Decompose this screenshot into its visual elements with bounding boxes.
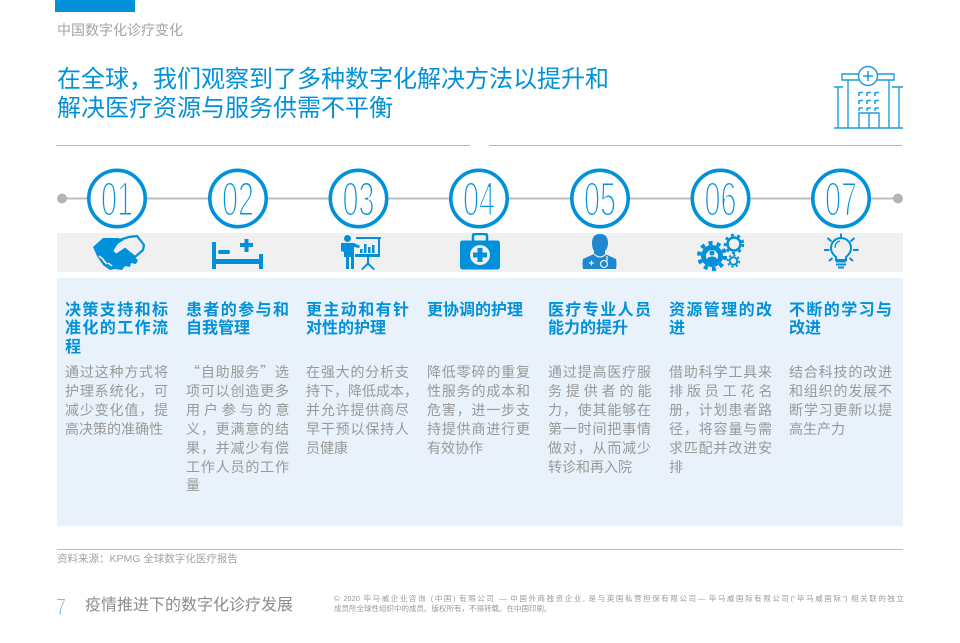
column 06: 资源管理的改 bbox=[669, 302, 772, 319]
step 05 bbox=[572, 170, 628, 227]
header divider left bbox=[56, 145, 470, 146]
icon: gears with person bbox=[699, 235, 743, 269]
icon: light bulb bbox=[824, 234, 858, 268]
icon: first aid kit bbox=[460, 234, 500, 270]
column 01 bbox=[65, 301, 168, 437]
column 01: 护理系统化，可 bbox=[65, 383, 168, 399]
footer title: 疫情推进下的数字化诊疗发展 bbox=[85, 597, 293, 614]
copyright: © 2020 毕马威企业咨询 (中国) 有限公司 — 中国外商独资企业, 是与英国私营担保有限公司— 毕马威国际有限公司(“毕马威国际”) 相关联的独立 bbox=[334, 594, 904, 603]
column 01: 程 bbox=[65, 339, 81, 356]
section label: 中国数字化诊疗变化 bbox=[57, 22, 183, 38]
column 02: 用 户 参 与 的 意 bbox=[186, 402, 289, 418]
column 02: 项可以创造更多 bbox=[186, 383, 289, 399]
step 06: 06 bbox=[704, 173, 737, 226]
column 07: 改进 bbox=[789, 320, 821, 337]
icon: hospital bed bbox=[212, 239, 263, 269]
column 06: 求匹配并改进安 bbox=[669, 440, 772, 456]
column 01: 决策支持和标 bbox=[65, 302, 168, 319]
step 04: 04 bbox=[463, 173, 495, 226]
step 03: 03 bbox=[342, 173, 375, 226]
column 02: 自我管理 bbox=[186, 320, 250, 337]
column 07: 高生产力 bbox=[789, 421, 845, 437]
step 07: 07 bbox=[825, 173, 857, 226]
column 06: 借助科学工具来 bbox=[669, 364, 772, 380]
title: 解决医疗资源与服务供需不平衡 bbox=[57, 94, 393, 122]
column 05: 力，使其能够在 bbox=[548, 402, 651, 418]
column 02: 量 bbox=[186, 477, 200, 493]
column 04: 危害，进一步支 bbox=[427, 402, 530, 418]
column 01: 高决策的准确性 bbox=[65, 421, 163, 437]
column 03 bbox=[306, 301, 418, 456]
header divider right bbox=[489, 145, 902, 146]
column 03: 在强大的分析支 bbox=[306, 364, 409, 380]
step 06 bbox=[692, 170, 749, 227]
column 05 bbox=[548, 301, 651, 475]
column 07: 断学习更新以提 bbox=[789, 402, 892, 418]
step 04 bbox=[451, 170, 507, 227]
icon: doctor bbox=[582, 234, 616, 269]
icon: handshake bbox=[93, 236, 144, 270]
step 01 bbox=[89, 170, 145, 227]
step 01: 01 bbox=[101, 173, 133, 226]
column 04: 持提供商进行更 bbox=[427, 421, 530, 437]
column 06: 进 bbox=[669, 320, 685, 337]
column 06: 册，计划患者路 bbox=[669, 402, 772, 418]
column 03: 更主动和有针 bbox=[306, 302, 409, 319]
step 02 bbox=[210, 170, 266, 227]
timeline bbox=[57, 168, 903, 228]
icon band bbox=[57, 233, 903, 272]
column 06: 排 版 员 工 花 名 bbox=[669, 383, 772, 399]
column 03: 并允许提供商尽 bbox=[306, 402, 409, 418]
column 05: 做对，从而减少 bbox=[548, 440, 651, 456]
step 02: 02 bbox=[222, 173, 254, 226]
column 02: 患者的参与和 bbox=[186, 302, 289, 319]
column 04 bbox=[427, 301, 530, 456]
step 03 bbox=[330, 170, 387, 227]
column 02: 工作人员的工作 bbox=[186, 459, 289, 475]
column 03: 对性的护理 bbox=[306, 320, 386, 337]
column 07: 不断的学习与 bbox=[789, 302, 892, 319]
column 05: 务 提 供 者 的 能 bbox=[548, 383, 651, 399]
column 01: 通过这种方式将 bbox=[65, 364, 168, 380]
column 06 bbox=[669, 301, 772, 475]
column 02: 义，更满意的结 bbox=[186, 421, 289, 437]
column 02 bbox=[186, 301, 289, 493]
column 06: 排 bbox=[669, 459, 683, 475]
panel: descriptions bbox=[57, 278, 903, 526]
column 04: 性服务的成本和 bbox=[427, 383, 530, 399]
step 05: 05 bbox=[584, 173, 616, 226]
icon: presenter with chart bbox=[341, 235, 381, 270]
title bbox=[57, 66, 609, 122]
icon: hospital bbox=[834, 66, 903, 129]
column 07: 和组织的发展不 bbox=[789, 383, 892, 399]
icons row bbox=[93, 233, 858, 271]
column 04: 有效协作 bbox=[427, 440, 483, 456]
step 07 bbox=[813, 170, 869, 227]
column 05: 能力的提升 bbox=[548, 320, 628, 337]
top accent bar bbox=[55, 0, 135, 12]
column 01: 减少变化值，提 bbox=[65, 402, 168, 418]
column 07 bbox=[789, 301, 892, 437]
column 02: 果，并减少有偿 bbox=[186, 440, 289, 456]
column 05: 转诊和再入院 bbox=[548, 459, 632, 475]
column 06: 径，将容量与需 bbox=[669, 421, 772, 437]
column 03: 持下，降低成本， bbox=[306, 383, 418, 399]
column 05: 通过提高医疗服 bbox=[548, 364, 651, 380]
column 05: 第一时间把事情 bbox=[548, 421, 651, 437]
copyright bbox=[334, 594, 904, 613]
column 05: 医疗专业人员 bbox=[548, 302, 651, 319]
column 01: 准化的工作流 bbox=[65, 320, 168, 337]
column 03: 早干预以保持人 bbox=[306, 421, 409, 437]
column 04: 降低零碎的重复 bbox=[427, 364, 530, 380]
copyright: 成员所全球性组织中的成员。版权所有，不得转载。在中国印刷。 bbox=[334, 604, 552, 613]
column 04: 更协调的护理 bbox=[427, 302, 523, 319]
source note: 资料来源：KPMG 全球数字化医疗报告 bbox=[57, 553, 238, 565]
column 03: 员健康 bbox=[306, 440, 348, 456]
column 07: 结合科技的改进 bbox=[789, 364, 892, 380]
title: 在全球，我们观察到了多种数字化解决方法以提升和 bbox=[57, 66, 609, 93]
column 02: “自助服务”选 bbox=[186, 362, 289, 382]
footer divider bbox=[57, 549, 903, 550]
